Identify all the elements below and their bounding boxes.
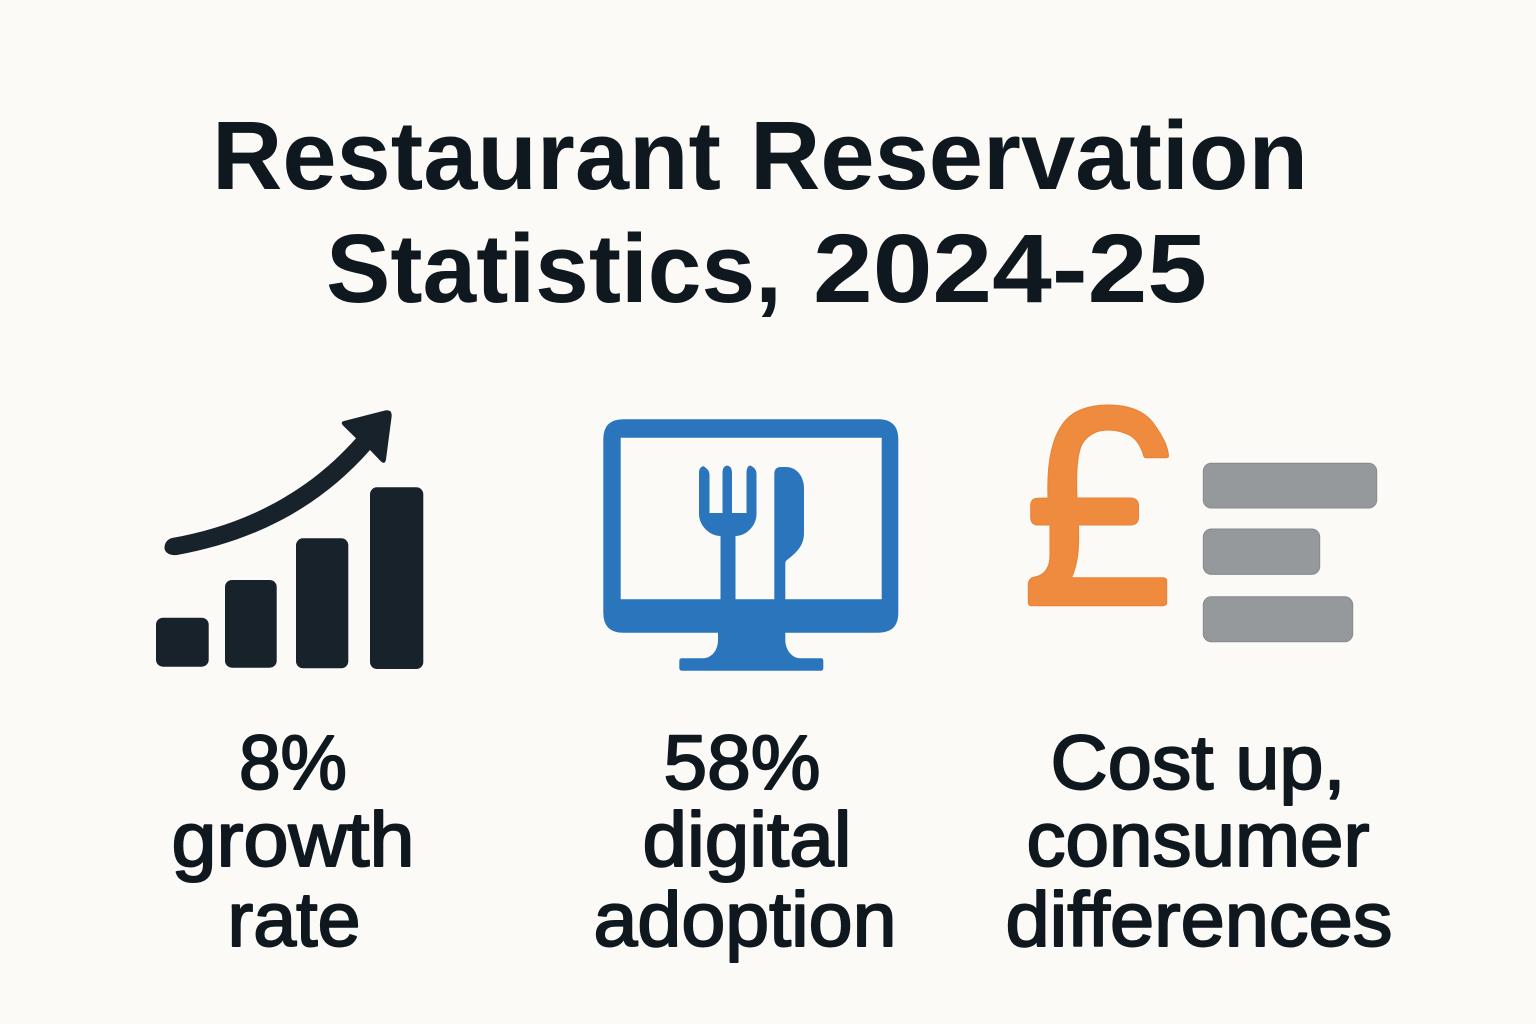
text: cost stat: consumer	[1026, 797, 1370, 883]
fork	[699, 466, 756, 600]
text: growth stat: 8%	[239, 720, 347, 806]
icon: pound sign with bars	[1028, 405, 1377, 642]
text: digital adoption stat: digital	[642, 797, 852, 883]
text: cost stat: differences	[1006, 877, 1392, 963]
text: growth stat	[172, 720, 414, 963]
title	[212, 101, 1308, 323]
title: Reservation	[750, 101, 1308, 210]
title: Statistics,	[326, 214, 782, 323]
text: digital adoption stat: adoption	[594, 877, 896, 963]
text: cost stat: Cost up,	[1050, 720, 1346, 806]
text: digital adoption stat	[594, 720, 896, 963]
title: 2024-25	[813, 214, 1207, 323]
grey bar 3	[1203, 597, 1353, 642]
text: digital adoption stat: 58%	[664, 720, 820, 806]
grey bar 2	[1203, 529, 1320, 574]
pound sign	[1028, 405, 1168, 606]
knife	[774, 467, 804, 600]
monitor stand	[679, 630, 823, 671]
bar 4	[370, 487, 423, 669]
bar 2	[225, 580, 277, 668]
icon: monitor with fork and knife	[603, 419, 898, 671]
bar 1	[156, 618, 209, 667]
text: cost stat	[1006, 720, 1392, 963]
bar 3	[296, 538, 348, 668]
icon: growth chart with arrow	[156, 410, 423, 669]
monitor screen frame	[603, 419, 898, 633]
title: Restaurant	[212, 101, 721, 210]
arrow	[164, 410, 392, 555]
text: growth stat: growth	[172, 797, 414, 883]
text: growth stat: rate	[228, 877, 360, 963]
grey bar 1	[1203, 463, 1377, 508]
